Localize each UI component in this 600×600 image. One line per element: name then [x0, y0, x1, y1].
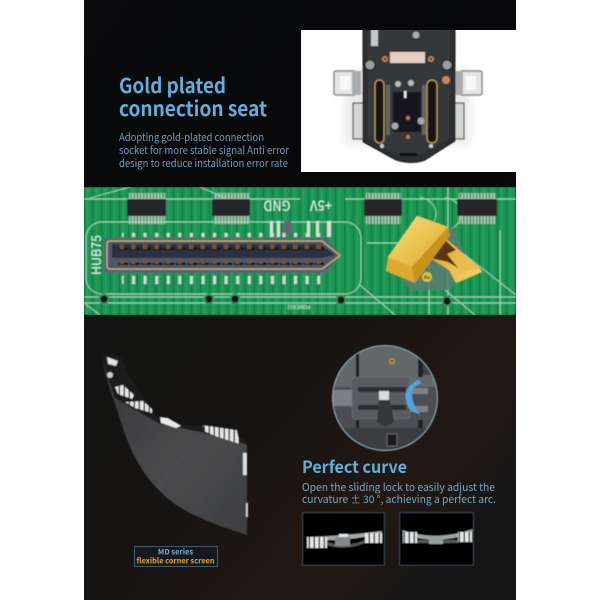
- heading: Gold plated connection seat: Gold plated: [119, 69, 226, 99]
- label: MD series flexible corner screen: [134, 546, 218, 566]
- driver chips: [127, 193, 497, 224]
- screen hardware: [107, 357, 118, 366]
- pin header: [390, 52, 425, 63]
- text block: perfect curve description: Open the sliding lock to easily adjust the: [302, 480, 495, 495]
- text block: gold plated description: [119, 130, 290, 171]
- text block: perfect curve description: curvature ± 30 °, achieving a perfect arc.: [302, 492, 496, 507]
- heading: Perfect curve: Perfect curve: [302, 454, 407, 478]
- PCB silk labels: HUB75: [86, 235, 105, 275]
- PCB silk labels: +5V: [309, 196, 332, 216]
- text block: gold plated description: Adopting gold-plated connection: [119, 130, 264, 145]
- illustration: flexible corner screen: [103, 354, 248, 535]
- gold sockets: [375, 80, 384, 143]
- text block: perfect curve description: [302, 480, 496, 507]
- module body: [363, 30, 455, 162]
- text block: gold plated description: design to reduce installation error rate: [119, 156, 288, 171]
- screen dark frame: [103, 354, 247, 450]
- PCB silk labels: POWER32: [287, 303, 310, 310]
- PCB silk lines: [84, 187, 516, 315]
- thumbnail: outward curve: [302, 512, 384, 566]
- mounting holes: [100, 294, 452, 306]
- thumbnail: inward curve: [400, 512, 474, 566]
- label: MD series flexible corner screen: flexible corner screen: [136, 556, 214, 566]
- lower section background: [84, 315, 516, 600]
- background: dark page column: [84, 0, 516, 600]
- terminals near GND: [270, 221, 331, 237]
- connector: [104, 238, 341, 273]
- label: MD series flexible corner screen: MD series: [158, 546, 193, 558]
- icon: gold bars: [386, 216, 482, 290]
- heading: Gold plated connection seat: connection seat: [119, 92, 267, 122]
- panel: green PCB with connector: [84, 187, 516, 315]
- PCB silk labels: [86, 196, 332, 310]
- soft shadow: [345, 70, 470, 145]
- text block: gold plated description: socket for more stable signal Anti error: [119, 143, 290, 158]
- heading: Gold plated connection seat: [119, 69, 267, 122]
- screen face: [103, 362, 247, 535]
- PCB silk labels: GND: [264, 196, 290, 216]
- panel: connection seat photo: [301, 30, 516, 172]
- connector leads: [122, 233, 322, 237]
- icon: gold bars: Au: [423, 274, 430, 281]
- latches: [334, 71, 482, 139]
- icon: sliding lock detail circle: [332, 345, 438, 452]
